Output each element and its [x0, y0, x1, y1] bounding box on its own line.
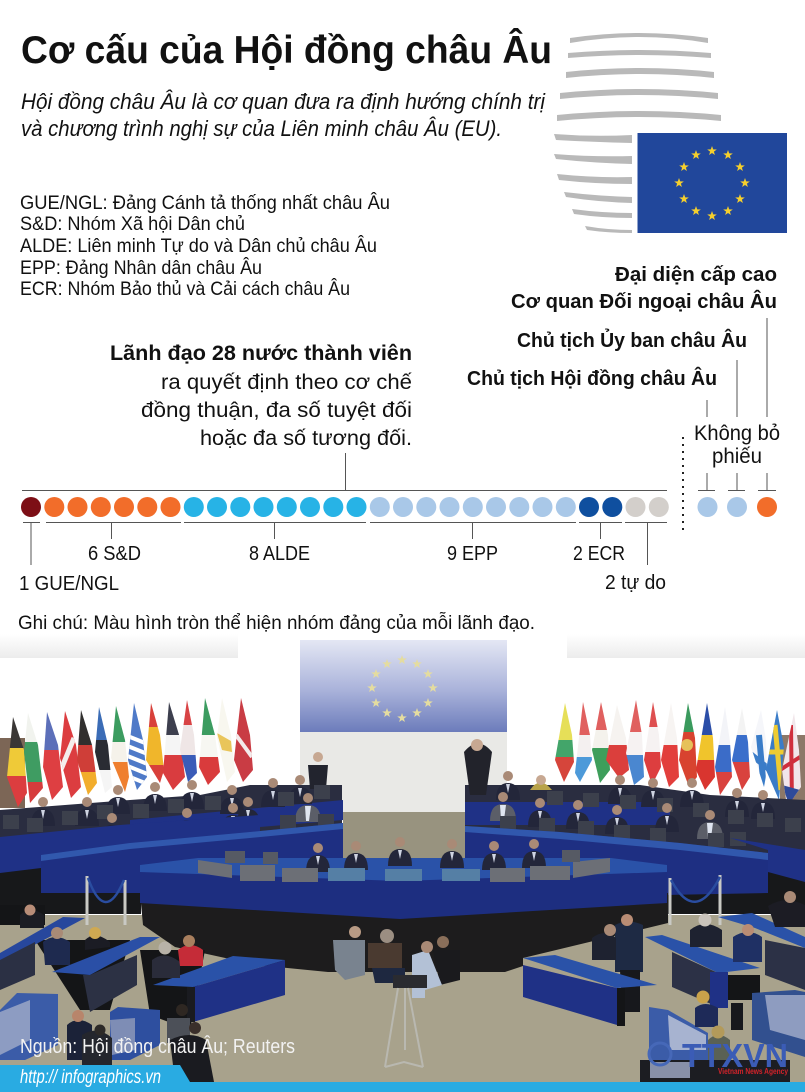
group count labels: 9 EPP — [447, 542, 498, 565]
logo: TTXVN: TTXVN — [682, 1037, 788, 1074]
source text: Nguồn: Hội đồng châu Âu; Reuters — [20, 1035, 295, 1058]
photo: photographers and tripod — [333, 926, 460, 1067]
intro text: và chương trình nghị sự của Liên minh châu Âu (EU). — [21, 116, 502, 141]
footer bar — [0, 1065, 805, 1092]
photo: upper left tier — [0, 752, 343, 850]
non-voting member labels: Cơ quan Đối ngoại châu Âu — [511, 289, 777, 313]
group count labels — [19, 542, 666, 595]
photo: black podium base — [140, 893, 668, 972]
photo: upper right tier — [464, 739, 805, 880]
title: Cơ cấu của Hội đồng châu Âu — [21, 28, 552, 72]
group count labels: 2 tự do — [605, 571, 666, 594]
party legend: ALDE: Liên minh Tự do và Dân chủ châu Âu — [20, 234, 377, 257]
bracket lines — [22, 318, 776, 565]
non-voting member labels — [467, 263, 777, 390]
note: Ghi chú: Màu hình tròn thể hiện nhóm đảng của mỗi lãnh đạo. — [18, 611, 535, 634]
intro text — [21, 89, 546, 141]
party legend: GUE/NGL: Đảng Cánh tả thống nhất châu Âu — [20, 191, 390, 214]
group count labels: 2 ECR — [573, 542, 625, 565]
photo: floor — [0, 915, 805, 1082]
photo: left flags — [7, 698, 253, 807]
leaders text block — [110, 341, 412, 450]
non-voting member labels: Chủ tịch Hội đồng châu Âu — [467, 366, 717, 390]
photo: lower left desks — [0, 904, 285, 1082]
group count labels: 1 GUE/NGL — [19, 572, 119, 595]
photo: central presidium desk — [140, 837, 667, 919]
photo: dark stair areas — [0, 862, 805, 914]
no-vote label — [694, 422, 780, 468]
non-voting member labels: Đại diện cấp cao — [615, 263, 777, 286]
party legend: ECR: Nhóm Bảo thủ và Cải cách châu Âu — [20, 277, 350, 300]
icon: EU flag — [638, 133, 787, 233]
photo: stanchions and ropes — [87, 875, 720, 925]
photo wall — [0, 634, 805, 872]
icon: European Council logo stripes — [554, 33, 721, 233]
party legend: S&D: Nhóm Xã hội Dân chủ — [20, 213, 245, 235]
intro text: Hội đồng châu Âu là cơ quan đưa ra định hướng chính trị — [21, 89, 546, 114]
non-voting member labels: Chủ tịch Ủy ban châu Âu — [517, 328, 747, 352]
party legend — [20, 191, 390, 300]
leaders text block: Lãnh đạo 28 nước thành viên — [110, 341, 412, 365]
photo: European Parliament chamber — [0, 634, 805, 1082]
no-vote label: phiếu — [712, 445, 762, 468]
leaders text block: hoặc đa số tương đối. — [200, 426, 412, 450]
logo: TTXVN: Vietnam News Agency — [718, 1067, 788, 1076]
seat dots: 28 leaders and 3 non-voting — [21, 497, 777, 517]
party legend: EPP: Đảng Nhân dân châu Âu — [20, 256, 262, 279]
photo: right flags — [555, 700, 801, 800]
group count labels: 8 ALDE — [249, 542, 310, 565]
footer bar: http:// infographics.vn — [20, 1067, 161, 1088]
photo: second tier desks — [0, 815, 805, 895]
photo: large EU banner — [300, 640, 507, 732]
leaders text block: đồng thuận, đa số tuyệt đối — [141, 398, 412, 422]
dotted separator — [682, 437, 684, 531]
group count labels: 6 S&D — [88, 542, 141, 565]
no-vote label: Không bỏ — [694, 422, 780, 445]
leaders text block: ra quyết định theo cơ chế — [161, 370, 412, 394]
photo: lower right desks — [523, 891, 805, 1082]
